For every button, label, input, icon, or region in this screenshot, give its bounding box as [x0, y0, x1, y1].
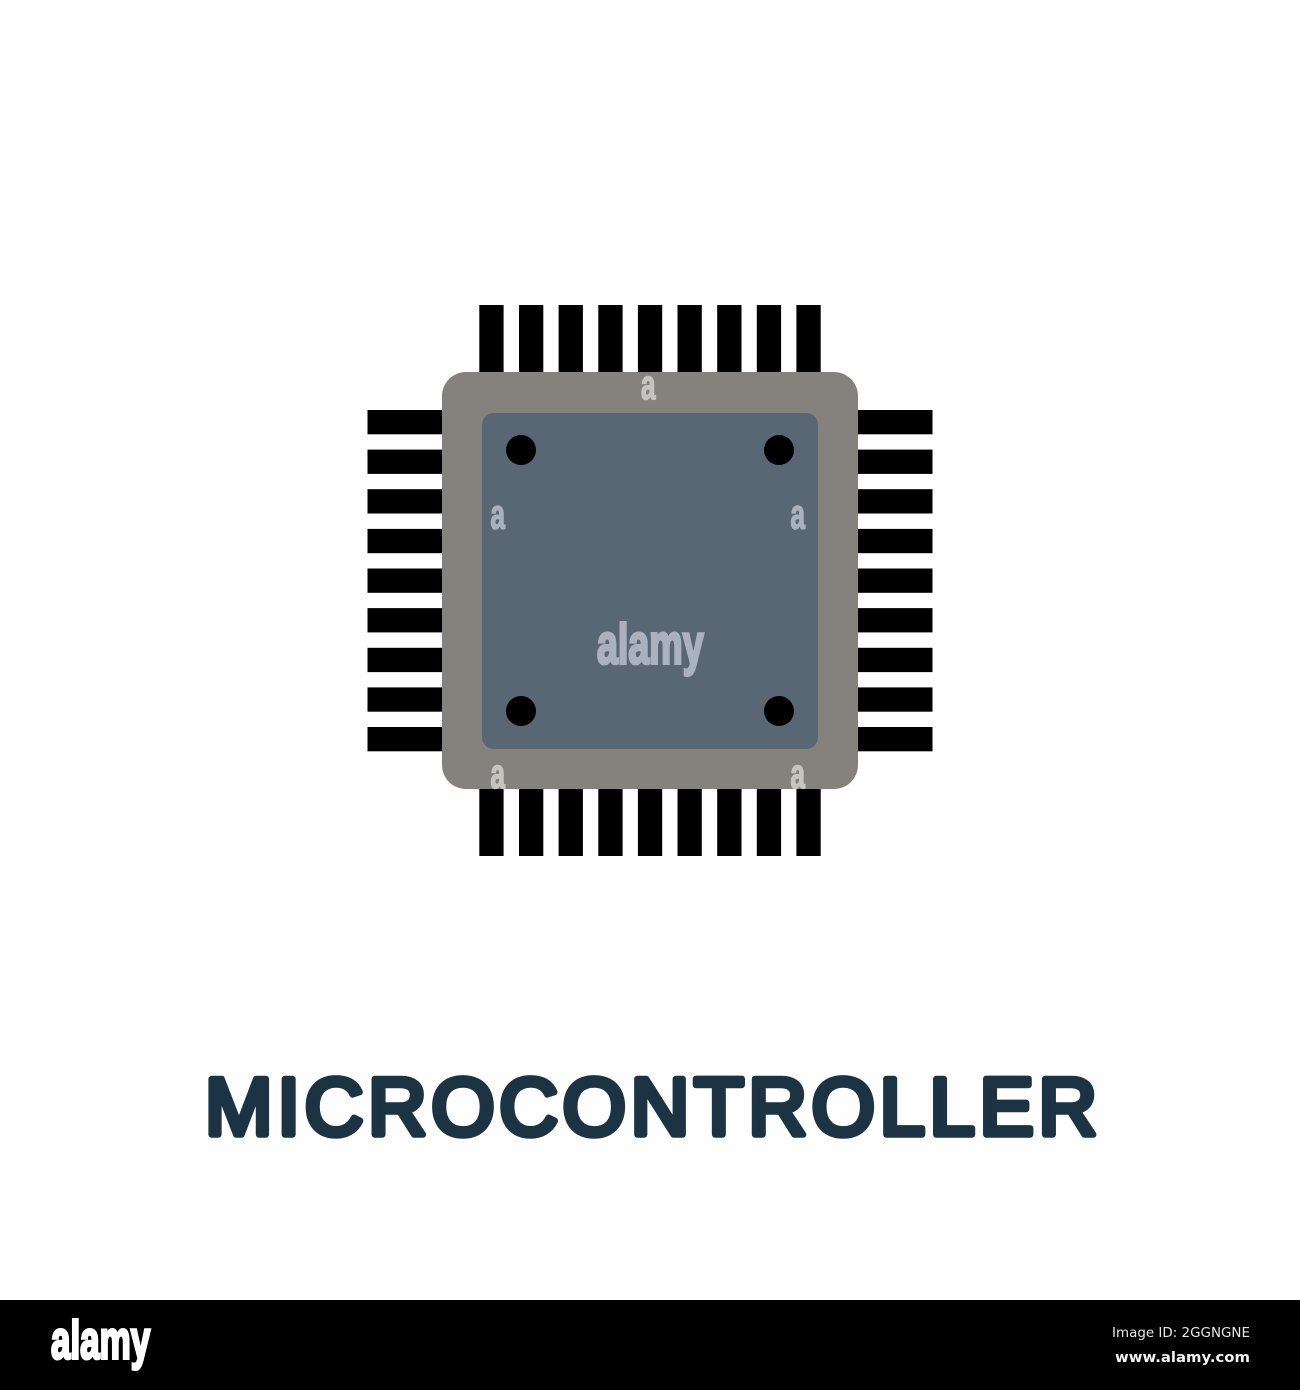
watermark: small a marks: a: [490, 751, 505, 798]
footer logo: alamy: [51, 1309, 150, 1371]
watermark: small a marks: a: [490, 491, 505, 538]
chip die: [482, 413, 818, 749]
title: MICROCONTROLLER: [205, 1062, 1097, 1152]
chip body: [442, 372, 858, 789]
die mounting dots: [506, 435, 794, 726]
left pins: [368, 410, 442, 751]
bottom pins: [479, 788, 821, 856]
right pins: [858, 410, 932, 751]
icon: microcontroller chip: [368, 305, 932, 856]
image id: Image ID: 2GGNGNE: [1112, 1325, 1250, 1341]
watermark: small a marks: a: [790, 751, 805, 798]
watermark: small a marks: a: [641, 362, 656, 409]
top pins: [479, 305, 821, 373]
watermark: central alamy: alamy: [597, 613, 704, 677]
website: www.alamy.com: [1115, 1350, 1250, 1366]
watermark: small a marks: [490, 362, 805, 798]
footer bar: [0, 1300, 1300, 1390]
watermark: small a marks: a: [790, 491, 805, 538]
